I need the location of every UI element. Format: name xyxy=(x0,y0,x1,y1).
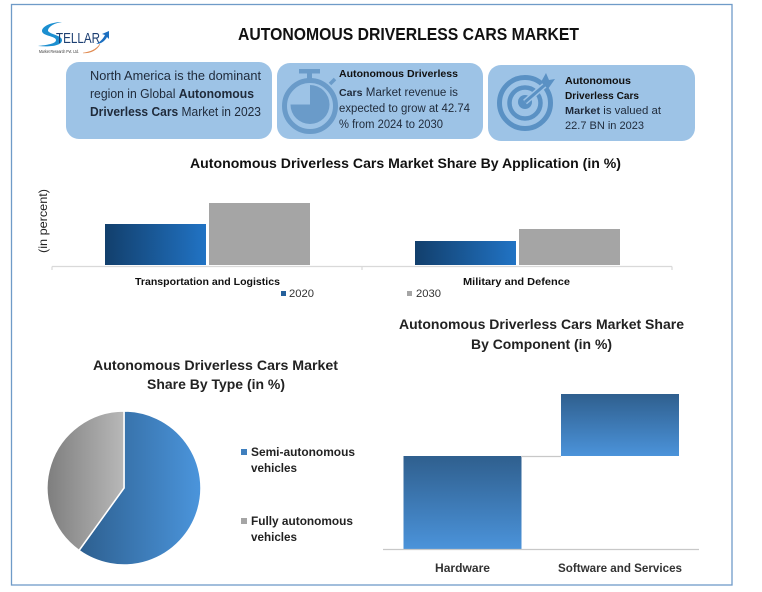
legend: type: vehicles xyxy=(251,461,297,475)
bar chart: share by application: Military and Defence xyxy=(463,276,570,288)
panel: revenue growth callout: % from 2024 to 2030 xyxy=(339,119,443,131)
panel: market value callout: Driverless Cars xyxy=(565,90,639,102)
legend: type: Semi-autonomous xyxy=(251,445,355,459)
panel: North America callout xyxy=(66,62,272,139)
panel: market value callout xyxy=(488,65,695,141)
legend: type xyxy=(241,445,355,544)
panel: market value callout: 22.7 BN in 2023 xyxy=(565,120,644,132)
heading: share by component xyxy=(399,316,684,352)
icon: stopwatch xyxy=(284,69,336,132)
panel: revenue growth callout: Autonomous Driverless xyxy=(339,68,458,80)
legend: type: vehicles xyxy=(251,530,297,544)
heading: share by type: Share By Type (in %) xyxy=(147,376,285,392)
title: AUTONOMOUS DRIVERLESS CARS MARKET xyxy=(238,24,579,44)
legend: 2030 xyxy=(416,288,441,300)
legend xyxy=(281,288,441,300)
heading: share by application: Autonomous Driverless Cars Market Share By Application (in %) xyxy=(190,155,621,171)
logo: Stellar Market Research xyxy=(38,22,109,54)
bar chart: share by component xyxy=(383,394,699,575)
panel: market value callout: Market is valued at xyxy=(565,105,661,117)
legend: type: Fully autonomous xyxy=(251,514,353,528)
panel: North America callout: North America is the dominant xyxy=(90,68,261,83)
logo: Stellar Market Research: Market Research Pvt. Ltd. xyxy=(39,49,79,54)
axis label: (in percent) xyxy=(36,189,50,253)
panel: revenue growth callout: Cars Market revenue is xyxy=(339,87,458,99)
icon: target with arrow xyxy=(500,73,555,128)
logo: Stellar Market Research: TELLAR xyxy=(56,31,100,47)
panel: revenue growth callout xyxy=(277,63,483,139)
panel: market value callout: Autonomous xyxy=(565,75,631,87)
heading: share by component: Autonomous Driverless Cars Market Share xyxy=(399,316,684,332)
panel: North America callout: Driverless Cars Market in 2023 xyxy=(90,104,261,119)
legend: 2020 xyxy=(289,288,314,300)
bar chart: share by component: Software and Services xyxy=(558,561,682,575)
bar chart: share by application: Transportation and Logistics xyxy=(135,276,280,288)
panel: North America callout: region in Global Autonomous xyxy=(90,86,254,101)
bar chart: share by application xyxy=(36,189,672,300)
heading: share by type xyxy=(93,357,338,392)
pie chart: share by type xyxy=(47,411,201,565)
heading: share by component: By Component (in %) xyxy=(471,336,612,352)
heading: share by type: Autonomous Driverless Cars Market xyxy=(93,357,338,373)
bar chart: share by component: Hardware xyxy=(435,561,490,575)
panel: revenue growth callout: expected to grow at 42.74 xyxy=(339,103,471,115)
